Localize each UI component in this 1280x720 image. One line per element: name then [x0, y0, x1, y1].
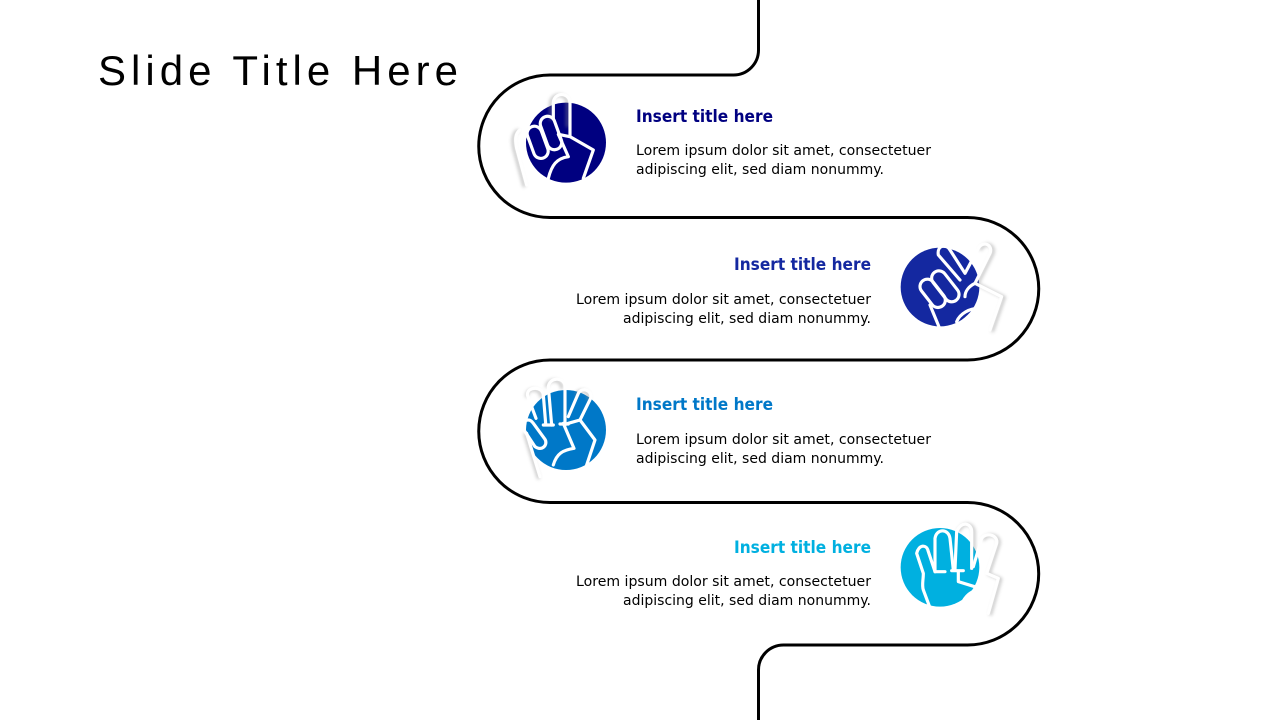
text block: Lorem ipsum dolor sit amet, consectetuer — [636, 432, 931, 448]
text block: adipiscing elit, sed diam nonummy. — [636, 162, 884, 178]
panel: step 1 — [513, 95, 931, 186]
heading: Insert title here — [734, 255, 871, 275]
panel: step 4 — [576, 524, 1001, 617]
winding path outline — [479, 0, 1039, 720]
panel: step 2 — [576, 244, 1004, 333]
text block — [636, 143, 931, 178]
icon: four finger hand — [901, 524, 1001, 617]
text block — [576, 574, 871, 609]
text block — [576, 292, 871, 327]
icon: one finger hand — [513, 95, 606, 186]
text block: adipiscing elit, sed diam nonummy. — [623, 593, 871, 609]
text block: adipiscing elit, sed diam nonummy. — [623, 311, 871, 327]
text block: Lorem ipsum dolor sit amet, consectetuer — [636, 143, 931, 159]
icon: three finger hand — [522, 379, 606, 478]
heading: Insert title here — [636, 395, 773, 415]
text block: Lorem ipsum dolor sit amet, consectetuer — [576, 574, 871, 590]
title: Slide Title Here — [98, 47, 458, 94]
heading: Insert title here — [734, 538, 871, 558]
text block: adipiscing elit, sed diam nonummy. — [636, 451, 884, 467]
text block: Lorem ipsum dolor sit amet, consectetuer — [576, 292, 871, 308]
text block — [636, 432, 931, 467]
panel: step 3 — [522, 379, 931, 478]
heading: Insert title here — [636, 107, 773, 127]
icon: two finger hand — [901, 244, 1004, 333]
